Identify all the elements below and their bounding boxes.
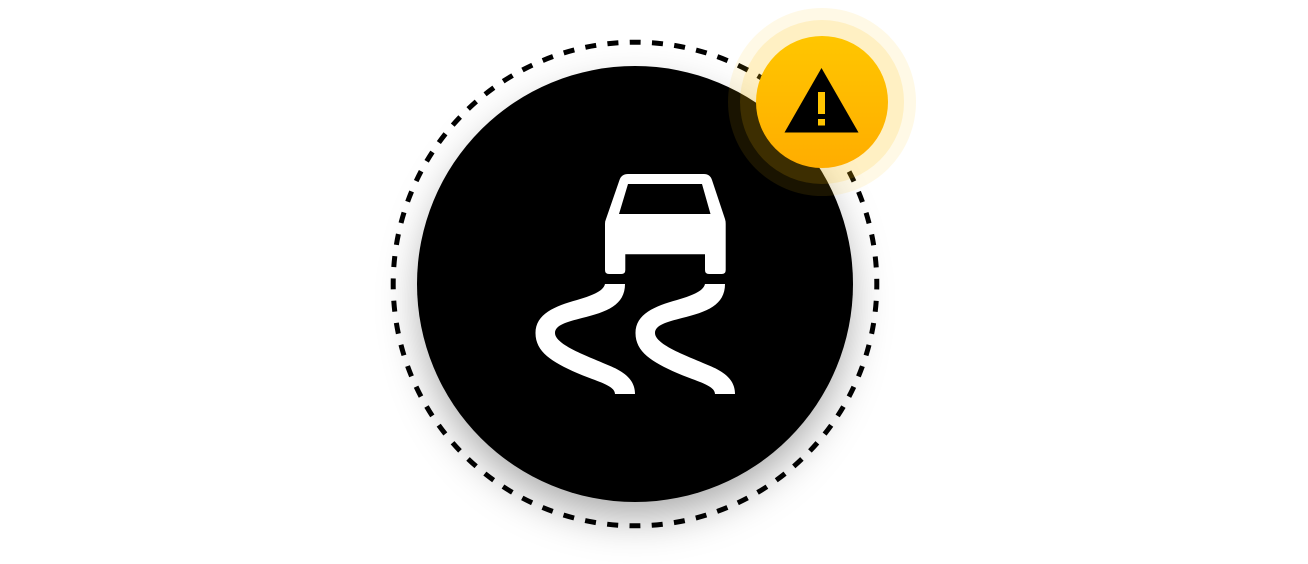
icon: warning triangle [784, 68, 858, 132]
skid track right [636, 284, 735, 394]
main circle shadow [421, 89, 849, 517]
dashed outer ring [393, 42, 877, 526]
car body [605, 174, 726, 274]
badge disc [756, 36, 888, 168]
badge glow inner [740, 20, 904, 184]
warning badge [728, 8, 916, 196]
badge glow outer [728, 8, 916, 196]
black main circle [417, 66, 853, 502]
skid track left [536, 284, 635, 394]
icon: skidding car [536, 174, 735, 394]
exclamation mark [818, 92, 825, 126]
